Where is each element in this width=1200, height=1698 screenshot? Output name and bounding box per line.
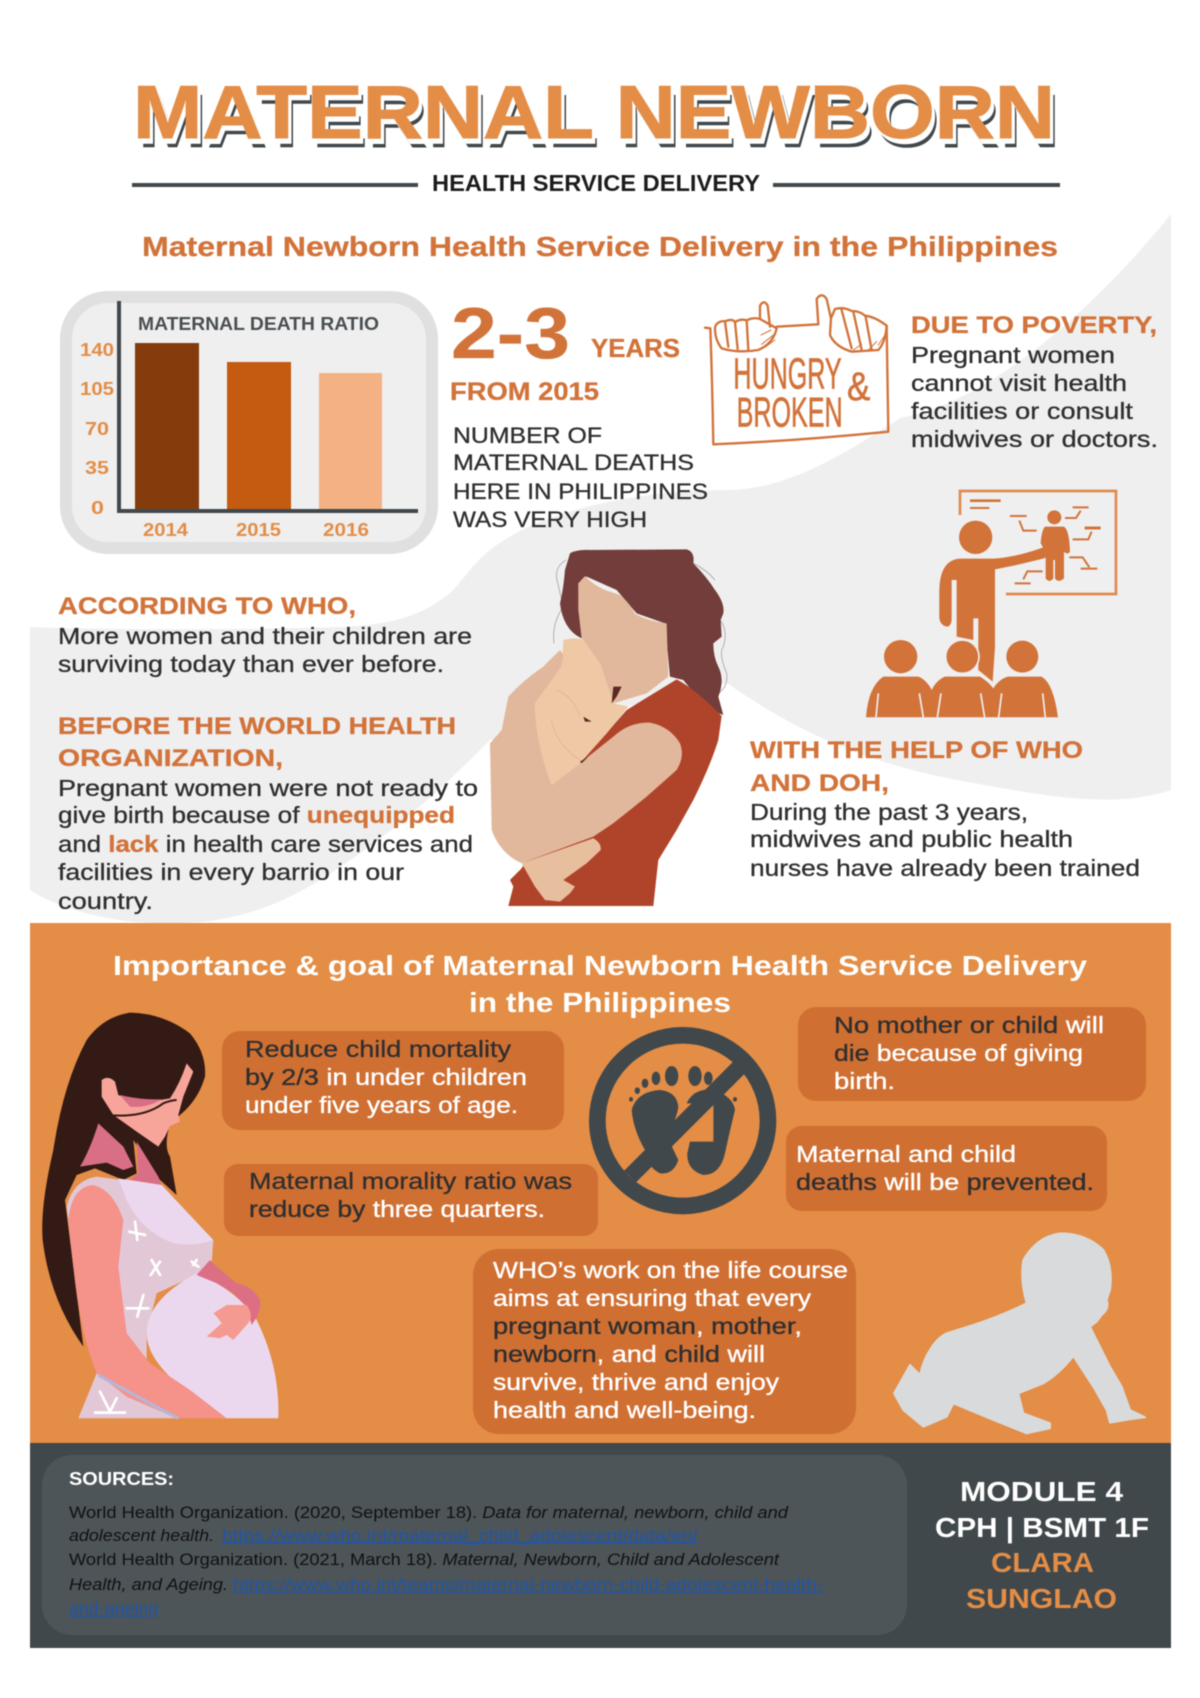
text: before the World Health Organization: give birth because of unequipped bbox=[58, 802, 455, 828]
credits bbox=[935, 1476, 1149, 1614]
text: due to poverty: facilities or consult bbox=[911, 398, 1134, 424]
text: number of maternal deaths: MATERNAL DEATHS bbox=[453, 450, 694, 475]
text: due to poverty: DUE TO POVERTY, bbox=[911, 312, 1157, 339]
chart title: MATERNAL DEATH RATIO bbox=[138, 314, 379, 334]
text: before the World Health Organization: ORGANIZATION, bbox=[58, 745, 283, 772]
text: before the World Health Organization: Pregnant women were not ready to bbox=[58, 775, 478, 801]
y axis labels: 35 bbox=[85, 458, 109, 478]
callout: maternal and child deaths prevented bbox=[786, 1126, 1107, 1211]
credits: CLARA bbox=[991, 1547, 1094, 1578]
source citations: https://www.who.int/teams/maternal-newborn-child-adolescent-health- bbox=[233, 1575, 823, 1594]
callout: WHO's work on the life course bbox=[473, 1249, 856, 1434]
callout: maternal and child deaths prevented: Maternal and child bbox=[796, 1141, 1016, 1167]
sign text: & bbox=[847, 365, 871, 409]
callout: reduce child mortality: under five years of age. bbox=[245, 1092, 518, 1118]
icon: no feet prohibition sign bbox=[597, 1035, 768, 1206]
callout: no mother or child will die: birth. bbox=[834, 1068, 895, 1094]
x axis labels: 2016 bbox=[323, 520, 369, 540]
stat: 2-3 years from 2015: 2-3 bbox=[451, 294, 570, 374]
text: with the help of WHO and DOH bbox=[750, 737, 1140, 881]
source citations: World Health Organization. (2021, March 18). Maternal, Newborn, Child and Adolescent bbox=[69, 1550, 780, 1569]
text: before the World Health Organization bbox=[58, 713, 478, 914]
callout: reduce child mortality: by 2/3 in under children bbox=[245, 1064, 527, 1090]
callout: WHO's work on the life course: aims at ensuring that every bbox=[493, 1285, 812, 1311]
text: with the help of WHO and DOH: During the past 3 years, bbox=[750, 799, 1028, 825]
background: grey wave bbox=[30, 214, 1171, 923]
text: according to WHO bbox=[58, 593, 472, 677]
title: MATERNAL NEWBORN bbox=[136, 75, 1058, 159]
y axis labels bbox=[80, 340, 114, 518]
callout: WHO's work on the life course: survive, thrive and enjoy bbox=[493, 1369, 780, 1395]
text: with the help of WHO and DOH: AND DOH, bbox=[750, 770, 889, 797]
text: due to poverty: Pregnant women bbox=[911, 342, 1115, 368]
source citations: and-ageing bbox=[69, 1599, 158, 1618]
subtitle with rules: HEALTH SERVICE DELIVERY bbox=[432, 170, 760, 196]
callout: maternal mortality ratio: Maternal morality ratio was bbox=[249, 1168, 572, 1194]
sign text: HUNGRY bbox=[733, 350, 842, 398]
sources heading: SOURCES: bbox=[69, 1469, 174, 1489]
panel: maternal death ratio bar chart bbox=[66, 297, 432, 548]
icon: teacher and pupils bbox=[866, 491, 1116, 717]
title: MATERNAL NEWBORN bbox=[138, 79, 1060, 163]
credits: CPH | BSMT 1F bbox=[935, 1512, 1149, 1543]
panel: importance and goal bbox=[30, 923, 1171, 1443]
illustration: mother holding baby bbox=[490, 549, 727, 906]
callout: WHO's work on the life course: WHO’s work on the life course bbox=[493, 1257, 848, 1283]
credits: MODULE 4 bbox=[960, 1476, 1123, 1507]
text: before the World Health Organization: facilities in every barrio in our bbox=[58, 859, 404, 885]
callout: reduce child mortality: Reduce child mortality bbox=[245, 1036, 512, 1062]
text: according to WHO: More women and their children are bbox=[58, 623, 472, 649]
text: with the help of WHO and DOH: WITH THE HELP OF WHO bbox=[750, 737, 1083, 764]
callout: maternal mortality ratio bbox=[224, 1164, 598, 1236]
panel: footer bbox=[30, 1443, 1171, 1648]
y axis labels: 140 bbox=[80, 340, 114, 360]
source citations bbox=[69, 1503, 823, 1618]
text: number of maternal deaths: NUMBER OF bbox=[453, 423, 602, 448]
stat: 2-3 years from 2015: YEARS bbox=[591, 333, 680, 363]
source citations: World Health Organization. (2020, September 18). Data for maternal, newborn, child and bbox=[69, 1503, 789, 1522]
source citations: adolescent health. bbox=[69, 1526, 214, 1545]
panel: sources bbox=[42, 1455, 907, 1635]
y axis labels: 105 bbox=[80, 379, 114, 399]
title: MATERNAL NEWBORN bbox=[133, 70, 1055, 154]
callout: reduce child mortality bbox=[222, 1031, 564, 1130]
callout: maternal mortality ratio: reduce by three quarters. bbox=[249, 1196, 545, 1222]
stat: 2-3 years from 2015 bbox=[450, 294, 680, 406]
panel heading: in the Philippines bbox=[469, 987, 731, 1018]
sign text bbox=[733, 350, 871, 436]
stat: 2-3 years from 2015: FROM 2015 bbox=[450, 378, 599, 406]
illustration: pregnant woman bbox=[42, 1013, 278, 1418]
callout: WHO's work on the life course: newborn , and child will bbox=[493, 1341, 765, 1367]
text: number of maternal deaths bbox=[453, 423, 708, 532]
text: due to poverty bbox=[911, 312, 1158, 452]
text: before the World Health Organization: and lack in health care services and bbox=[58, 831, 473, 857]
callout: maternal and child deaths prevented: deaths will be prevented. bbox=[796, 1169, 1094, 1195]
text: with the help of WHO and DOH: midwives and public health bbox=[750, 826, 1073, 852]
source citations: https://www.who.int/maternal_child_adolescent/data/en/ bbox=[222, 1526, 698, 1545]
callout: WHO's work on the life course: pregnant woman , mother , bbox=[493, 1313, 802, 1339]
callout: no mother or child will die bbox=[798, 1007, 1146, 1101]
x axis labels bbox=[143, 520, 369, 540]
callout: no mother or child will die: die because of giving bbox=[834, 1040, 1083, 1066]
icon: hungry and broken sign bbox=[705, 295, 888, 444]
text: according to WHO: surviving today than ever before. bbox=[58, 651, 444, 677]
y axis labels: 0 bbox=[91, 498, 104, 518]
text: number of maternal deaths: HERE IN PHILIPPINES bbox=[453, 479, 708, 504]
illustration: crawling baby silhouette bbox=[894, 1233, 1145, 1433]
sign text: BROKEN bbox=[737, 389, 843, 436]
text: with the help of WHO and DOH: nurses have already been trained bbox=[750, 855, 1140, 881]
y axis labels: 70 bbox=[85, 419, 109, 439]
bars bbox=[135, 343, 382, 509]
panel heading bbox=[113, 950, 1087, 1018]
source citations: Health, and Ageing. bbox=[69, 1575, 228, 1594]
text: according to WHO: ACCORDING TO WHO, bbox=[58, 593, 356, 620]
text: due to poverty: cannot visit health bbox=[911, 370, 1127, 396]
callout: no mother or child will die: No mother or child will bbox=[834, 1012, 1104, 1038]
text: before the World Health Organization: country. bbox=[58, 888, 153, 914]
credits: SUNGLAO bbox=[966, 1583, 1117, 1614]
text: number of maternal deaths: WAS VERY HIGH bbox=[453, 507, 647, 532]
text: before the World Health Organization: BEFORE THE WORLD HEALTH bbox=[58, 713, 456, 740]
section heading: Maternal Newborn Health Service Delivery in the Philippines bbox=[142, 231, 1058, 262]
x axis labels: 2015 bbox=[236, 520, 281, 540]
text: due to poverty: midwives or doctors. bbox=[911, 426, 1158, 452]
panel heading: Importance & goal of Maternal Newborn Health Service Delivery bbox=[113, 950, 1087, 981]
callout: WHO's work on the life course: health and well-being. bbox=[493, 1397, 756, 1423]
x axis labels: 2014 bbox=[143, 520, 188, 540]
subtitle with rules bbox=[132, 170, 1060, 196]
